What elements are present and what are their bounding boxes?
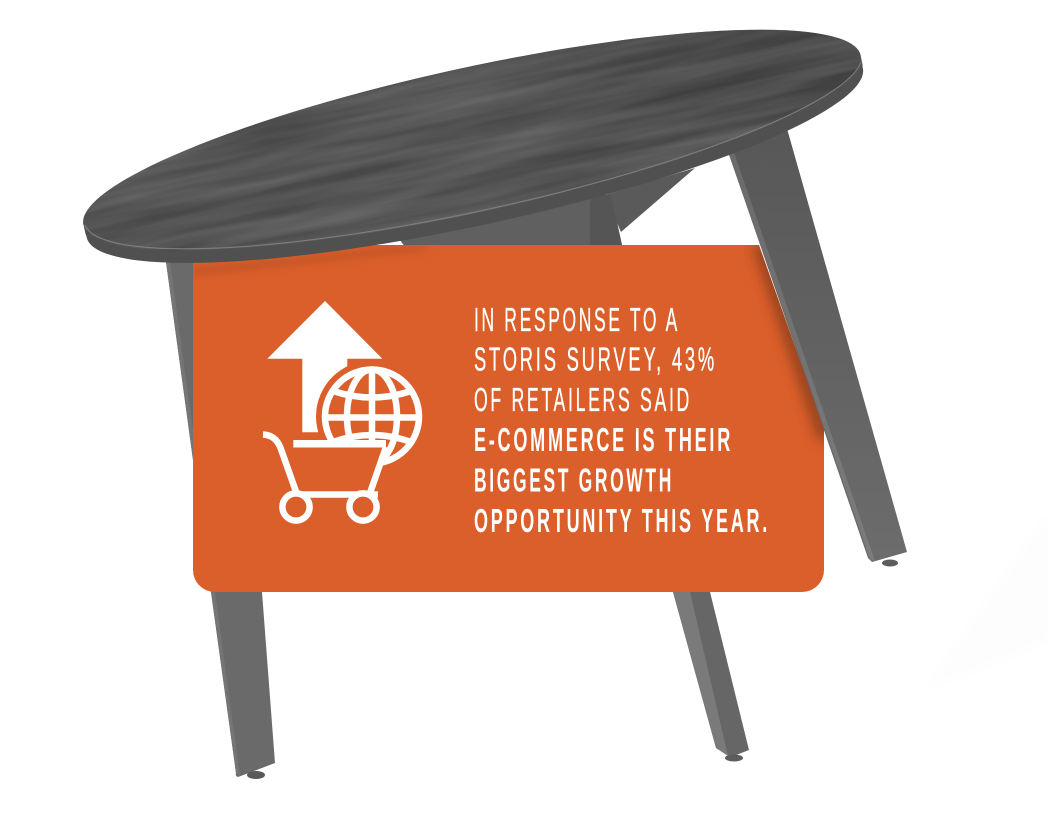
back right table leg [590, 195, 749, 762]
wood grain [83, 30, 861, 250]
infographic: table with survey card [83, 30, 907, 779]
faint background shape [925, 510, 1050, 690]
survey text block: E-COMMERCE IS THEIR [474, 421, 733, 458]
table bracket [605, 168, 695, 232]
survey text block: STORIS SURVEY, 43% [474, 340, 717, 378]
front right table leg [725, 118, 907, 566]
icon: globe [325, 370, 419, 464]
survey text block: BIGGEST GROWTH [474, 462, 674, 498]
shadows on card [193, 245, 835, 440]
icon: shopping cart [263, 434, 386, 521]
survey text block: OF RETAILERS SAID [474, 381, 692, 418]
survey text block [474, 301, 770, 539]
orange callout card [193, 245, 835, 592]
icon: up arrow [267, 301, 382, 432]
survey text block: OPPORTUNITY THIS YEAR. [474, 502, 770, 539]
table surface [68, 0, 876, 295]
icon: cart with globe and growth arrow [263, 301, 428, 521]
table apron under top [400, 195, 597, 247]
rim highlight [85, 62, 861, 249]
table rim [69, 0, 879, 308]
left table leg [166, 258, 275, 779]
table top [83, 30, 864, 263]
survey text block: IN RESPONSE TO A [474, 301, 680, 338]
